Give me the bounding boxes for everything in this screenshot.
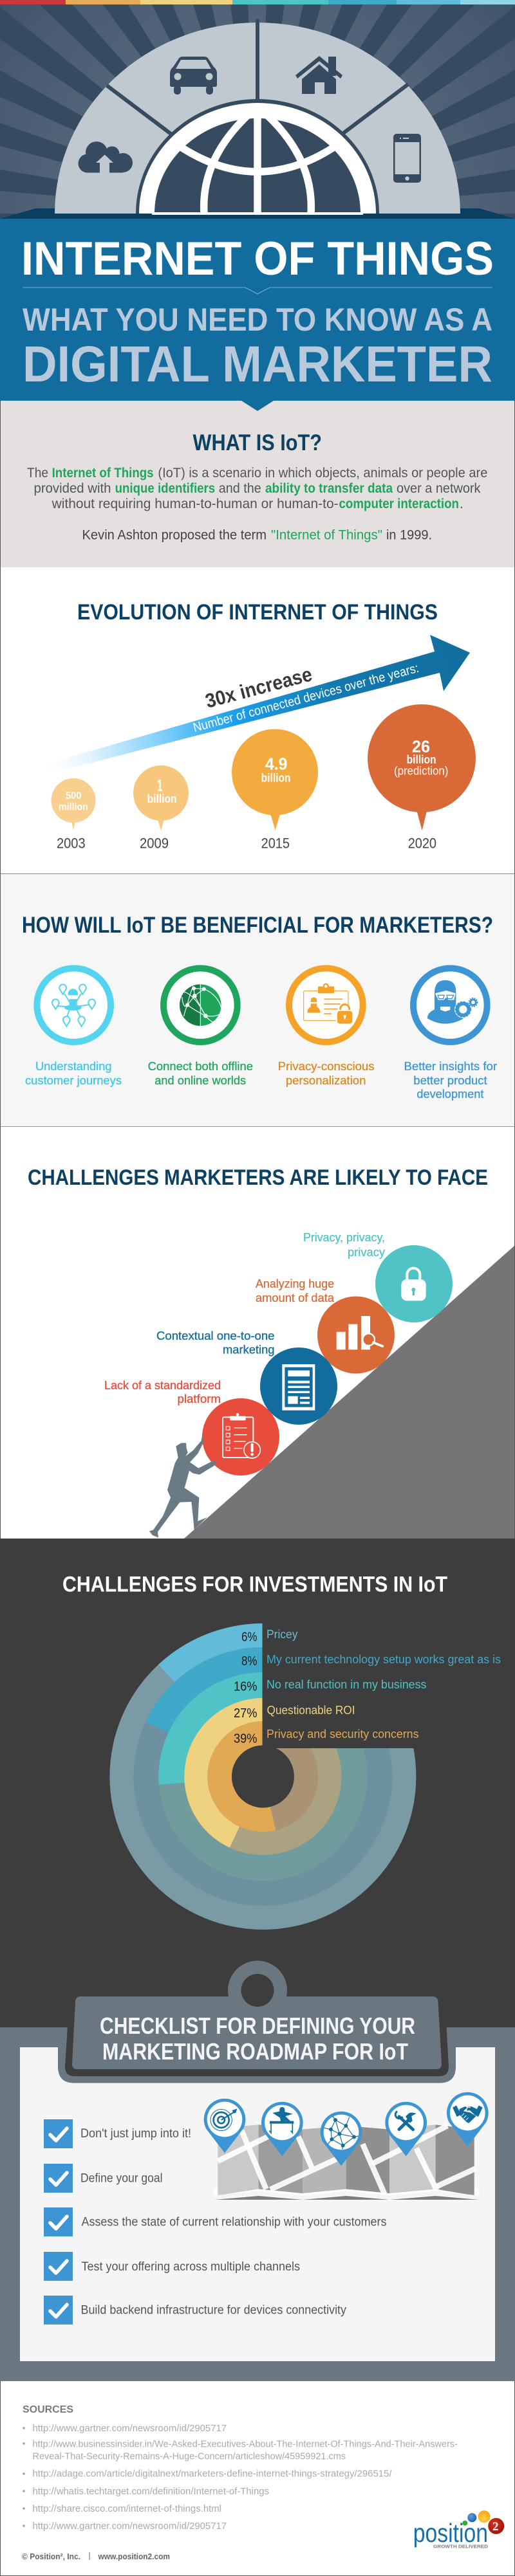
checklist item 1: Don't just jump into it! bbox=[80, 2127, 191, 2141]
roadmap illustration bbox=[204, 2092, 489, 2200]
panel: evolution of IoT bbox=[0, 567, 515, 873]
bubble: 2009: 2009 bbox=[140, 835, 169, 852]
clipboard clip band bbox=[58, 2027, 456, 2083]
checklist item 2: Define your goal bbox=[80, 2171, 162, 2186]
subtitle line 2: DIGITAL MARKETER bbox=[23, 335, 492, 392]
benefit labels: insights: Better insights for bbox=[404, 1060, 497, 1073]
checklist item 1 bbox=[44, 2119, 191, 2148]
slope bbox=[184, 1245, 515, 1539]
chart legend bbox=[267, 1628, 501, 1740]
definition paragraph: provided with bbox=[33, 481, 111, 496]
sources list: http://www.gartner.com/newsroom/id/2905717 bbox=[32, 2521, 227, 2532]
top colour bar bbox=[0, 0, 515, 5]
benefit labels: privacy bbox=[278, 1060, 375, 1087]
checklist item 5: Build backend infrastructure for devices connectivity bbox=[81, 2304, 346, 2317]
chart legend: Privacy and security concerns bbox=[267, 1728, 418, 1740]
label: standardized platform bbox=[104, 1379, 221, 1405]
bubble: 2020: billion bbox=[407, 753, 436, 766]
Kevin Ashton note: "Internet of Things" bbox=[271, 528, 382, 543]
benefit labels: customer journeys: customer journeys bbox=[25, 1074, 122, 1087]
checklist item 4 bbox=[44, 2252, 300, 2281]
panel: checklist bbox=[0, 1960, 515, 2381]
chart legend: No real function in my business bbox=[267, 1678, 426, 1691]
definition paragraph: and the bbox=[219, 481, 261, 496]
pin: hurdle bbox=[261, 2102, 303, 2156]
chart values bbox=[234, 1630, 258, 1746]
checklist card bbox=[20, 2047, 495, 2361]
sunburst rays bbox=[0, 0, 515, 264]
icon: smartphone bbox=[393, 134, 421, 183]
footer credit: © Position², Inc. bbox=[22, 2552, 80, 2561]
icon: connected worlds bbox=[164, 968, 238, 1042]
chart values: 8% bbox=[241, 1654, 258, 1668]
label: one-to-one marketing: marketing bbox=[223, 1343, 274, 1356]
pin: target bbox=[204, 2099, 245, 2153]
heading tab: CHECKLIST FOR DEFINING YOUR bbox=[100, 2013, 415, 2039]
chart values: 6% bbox=[241, 1630, 258, 1644]
icon: product insights bbox=[413, 968, 487, 1042]
panel: benefits for marketers bbox=[0, 873, 515, 1127]
footer credit: www.position2.com bbox=[98, 2552, 170, 2561]
bubble: 2003: 500 bbox=[66, 790, 82, 801]
panel: marketer challenges bbox=[0, 1127, 515, 1539]
benefit labels: insights: development bbox=[417, 1088, 483, 1101]
boulder: clipboard bbox=[202, 1398, 279, 1475]
panel: what is IoT bbox=[0, 401, 515, 567]
clipboard ring bbox=[228, 1960, 287, 2020]
arrow caption: Number of connected devices over the years: bbox=[192, 661, 420, 735]
divider with notch bbox=[23, 288, 492, 294]
sources list bbox=[23, 2423, 458, 2532]
chart legend: Questionable ROI bbox=[267, 1704, 355, 1717]
Kevin Ashton note: in 1999. bbox=[386, 528, 432, 543]
sources list: http://www.businessinsider.in/We-Asked-Executives-About-The-Internet-Of-Things-And-Their-Answers- bbox=[32, 2439, 458, 2450]
checklist item 4: Test your offering across multiple channels bbox=[81, 2260, 300, 2274]
sources list: http://adage.com/article/digitalnext/marketers-define-internet-things-strategy/296515/ bbox=[32, 2469, 392, 2480]
Kevin Ashton note: Kevin Ashton proposed the term bbox=[82, 528, 267, 543]
benefit labels: connected worlds: and online worlds bbox=[154, 1074, 246, 1087]
benefit labels: customer journeys bbox=[25, 1060, 122, 1087]
heading tab bbox=[72, 1974, 442, 2069]
label: data: amount of data bbox=[256, 1292, 335, 1304]
bubble: 2015 bbox=[232, 729, 318, 852]
arrow: growth bbox=[37, 635, 470, 776]
bubble: 2009: 1 bbox=[157, 776, 162, 795]
heading: WHAT IS IoT? bbox=[193, 430, 322, 455]
bubble: 2003 bbox=[52, 778, 95, 852]
Position2 logo: 2 bbox=[492, 2520, 498, 2534]
panel: investment challenges bbox=[0, 1539, 515, 2034]
bubble: 2009 bbox=[133, 765, 189, 852]
bubble: 2009: billion bbox=[147, 792, 177, 805]
bubble: 2003: 2003 bbox=[57, 835, 86, 852]
sources list: Reveal-That-Security-Remains-A-Huge-Concern/articleshow/45959921.cms bbox=[32, 2451, 346, 2462]
chart legend: Pricey bbox=[267, 1628, 297, 1641]
bubble: 2020: 2020 bbox=[408, 835, 436, 852]
bubble: 2015: 2015 bbox=[261, 835, 290, 852]
benefit labels: privacy: Privacy-conscious bbox=[278, 1060, 375, 1073]
label: standardized platform: Lack of a standardized bbox=[104, 1379, 221, 1392]
checklist item 3 bbox=[44, 2207, 386, 2236]
checklist item 2 bbox=[44, 2164, 162, 2193]
title banner bbox=[0, 219, 515, 411]
dome bbox=[55, 23, 460, 214]
bubble: 2003: million bbox=[59, 802, 88, 813]
figure pushing boulder bbox=[149, 1434, 217, 1538]
sources list: http://share.cisco.com/internet-of-things.html bbox=[32, 2503, 221, 2514]
benefit labels: insights bbox=[404, 1060, 497, 1101]
benefit labels: connected worlds bbox=[148, 1060, 253, 1087]
checklist item 5 bbox=[44, 2296, 346, 2325]
pin: tools bbox=[385, 2102, 427, 2156]
globe bbox=[136, 99, 379, 215]
bubble: 2015: 4.9 bbox=[265, 754, 287, 773]
folded map bbox=[214, 2124, 479, 2200]
definition paragraph: ability to transfer data bbox=[265, 481, 393, 496]
icon: privacy personalization bbox=[289, 968, 363, 1042]
benefit labels: insights: better product bbox=[413, 1074, 487, 1087]
panel: sources bbox=[0, 2381, 515, 2576]
icon: car bbox=[170, 57, 217, 95]
heading tab: MARKETING ROADMAP FOR IoT bbox=[102, 2038, 408, 2065]
definition paragraph: The bbox=[27, 466, 48, 480]
platform bbox=[0, 208, 515, 219]
icon: house bbox=[295, 56, 342, 94]
dome dividers bbox=[107, 19, 408, 135]
bubble: 2020 bbox=[368, 704, 476, 852]
boulder: privacy lock bbox=[375, 1245, 453, 1322]
definition paragraph: . bbox=[460, 497, 464, 511]
label: privacy: Privacy, privacy, bbox=[303, 1231, 385, 1244]
boulder: document bbox=[260, 1347, 337, 1425]
heading: CHALLENGES FOR INVESTMENTS IN IoT bbox=[62, 1572, 447, 1596]
icon: cloud upload bbox=[79, 142, 133, 173]
bubble: 2020: 26 bbox=[412, 736, 430, 756]
chart legend: My current technology setup works great as is bbox=[267, 1653, 501, 1666]
definition paragraph bbox=[27, 466, 487, 511]
radial bar chart bbox=[109, 1608, 515, 1930]
pin: network bbox=[321, 2112, 362, 2166]
sources list: http://www.gartner.com/newsroom/id/2905717 bbox=[32, 2423, 227, 2434]
heading: EVOLUTION OF INTERNET OF THINGS bbox=[77, 600, 438, 625]
benefit labels: privacy: personalization bbox=[286, 1074, 366, 1087]
definition paragraph: over a network bbox=[397, 481, 481, 496]
label: data: Analyzing huge bbox=[256, 1277, 334, 1290]
icon: customer journeys bbox=[37, 968, 111, 1042]
benefit labels: connected worlds: Connect both offline bbox=[148, 1060, 253, 1073]
definition paragraph: unique identifiers bbox=[115, 481, 215, 496]
benefit labels: customer journeys: Understanding bbox=[35, 1060, 112, 1073]
sources list: http://whatis.techtarget.com/definition/Internet-of-Things bbox=[32, 2486, 269, 2497]
label: standardized platform: platform bbox=[178, 1393, 221, 1405]
pin: handshake bbox=[447, 2092, 489, 2146]
label: privacy bbox=[303, 1231, 385, 1259]
Position2 logo: GROWTH DELIVERED bbox=[433, 2544, 489, 2550]
Position2 logo: position bbox=[413, 2518, 488, 2548]
checklist item 3: Assess the state of current relationship with your customers bbox=[81, 2216, 386, 2229]
label: privacy: privacy bbox=[348, 1246, 385, 1259]
header hero illustration bbox=[0, 0, 515, 264]
chart values: 39% bbox=[234, 1732, 258, 1746]
chart values: 16% bbox=[234, 1680, 258, 1694]
Kevin Ashton note bbox=[82, 528, 432, 543]
bubble: 2020: (prediction) bbox=[394, 765, 448, 778]
chart values: 27% bbox=[234, 1706, 258, 1721]
boulder: data analysis bbox=[317, 1297, 395, 1374]
definition paragraph: without requiring human-to-human or human-to- bbox=[52, 497, 339, 511]
footer credit bbox=[22, 2552, 170, 2561]
label: data bbox=[256, 1277, 335, 1304]
main title: INTERNET OF THINGS bbox=[21, 233, 494, 285]
definition paragraph: (IoT) is a scenario in which objects, animals or people are bbox=[158, 466, 487, 480]
sources heading: SOURCES bbox=[23, 2404, 73, 2415]
30x increase label: 30x increase bbox=[203, 662, 315, 713]
label: one-to-one marketing bbox=[156, 1329, 274, 1356]
definition paragraph: computer interaction bbox=[339, 497, 459, 511]
definition paragraph: Internet of Things bbox=[52, 466, 154, 480]
bubble: 2015: billion bbox=[261, 772, 291, 785]
label: one-to-one marketing: Contextual one-to-one bbox=[156, 1329, 274, 1342]
